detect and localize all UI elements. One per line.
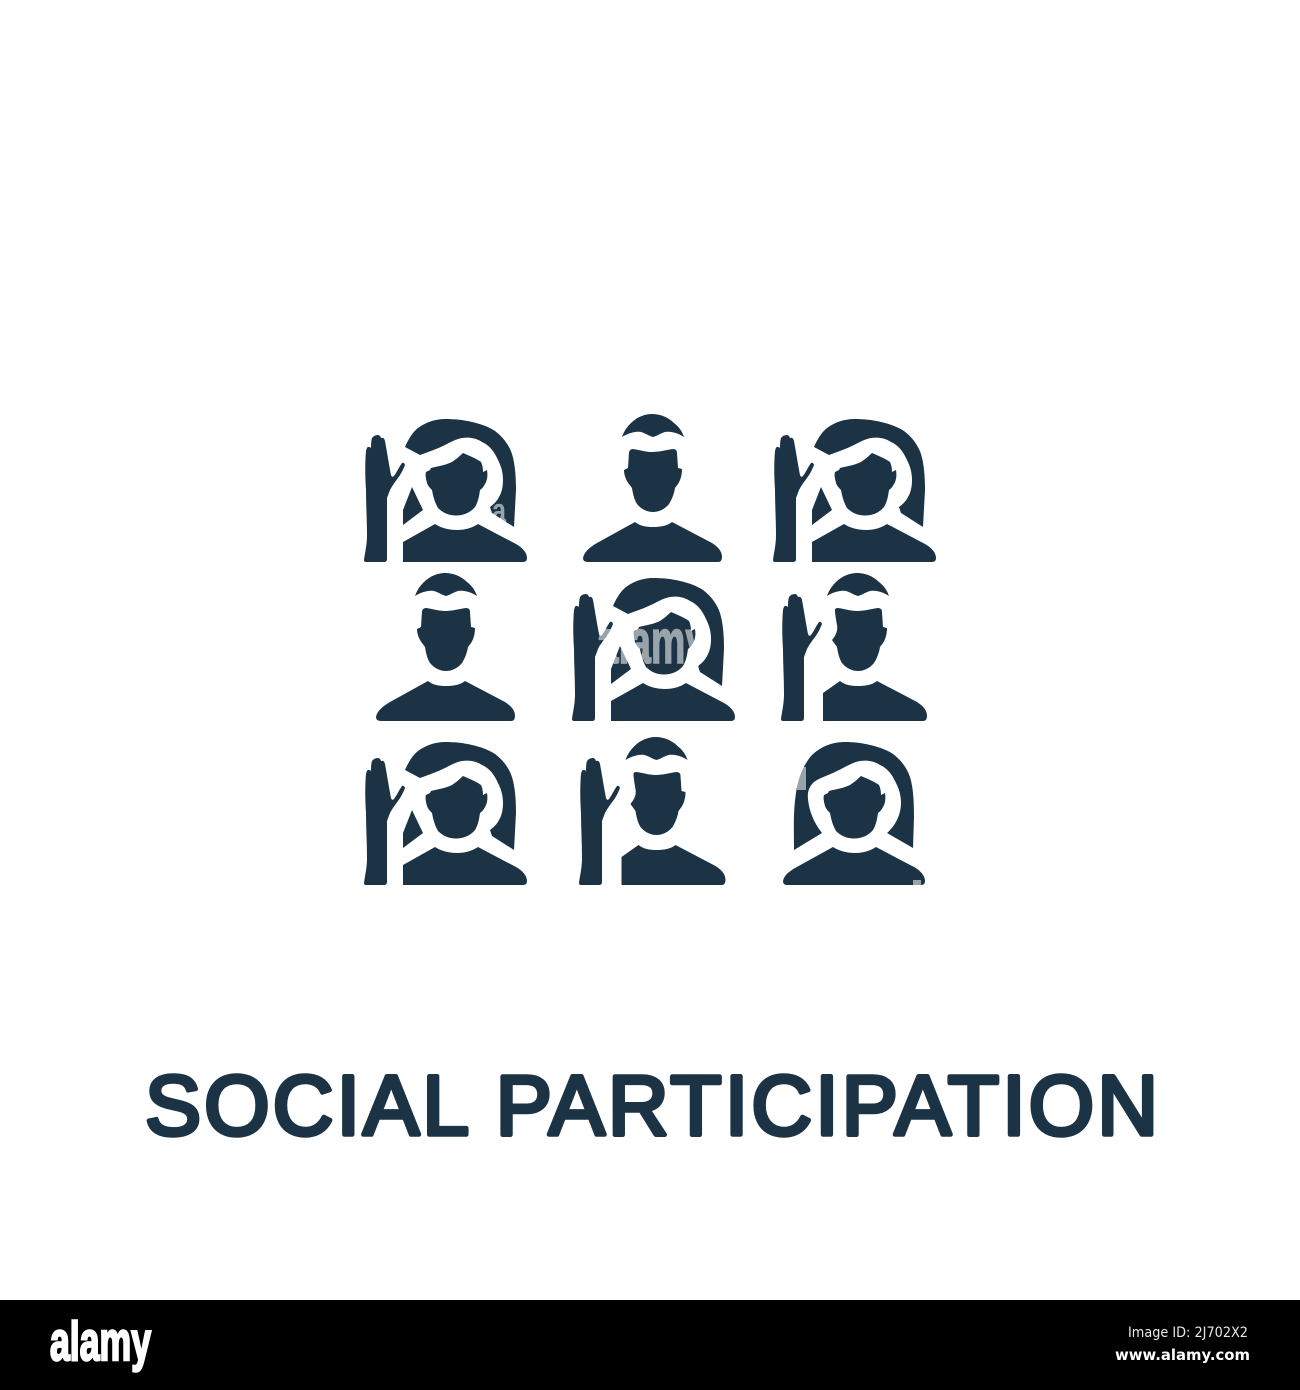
icon grid: social participation (364, 414, 936, 885)
icon: woman raising hand, row 1 column 1 (364, 419, 527, 562)
icon: man raising hand, row 2 column 3 (781, 573, 927, 721)
icon: woman raising hand, row 2 column 2 (572, 578, 735, 721)
watermark fragment on shoulder (913, 880, 921, 885)
footer logo: alamy (50, 1310, 151, 1372)
watermark over icons (492, 492, 921, 885)
title: SOCIAL PARTICIPATION (145, 1058, 1158, 1152)
icon: woman, row 3 column 3 (783, 742, 925, 885)
icon: man raising hand, row 3 column 2 (579, 737, 726, 885)
watermark fragment on hair (797, 767, 806, 790)
watermark fragment: a (492, 492, 507, 530)
website: www.alamy.com (1115, 1346, 1250, 1364)
icon: woman raising hand, row 3 column 1 (364, 742, 527, 885)
icon: woman raising hand, row 1 column 3 (773, 419, 936, 562)
image id: Image ID: 2J702X2 (1128, 1325, 1248, 1341)
watermark word: alamy (597, 608, 707, 677)
icon: man, row 1 column 2 (583, 414, 722, 562)
icon: man, row 2 column 1 (376, 573, 515, 721)
footer bar (0, 1300, 1300, 1390)
